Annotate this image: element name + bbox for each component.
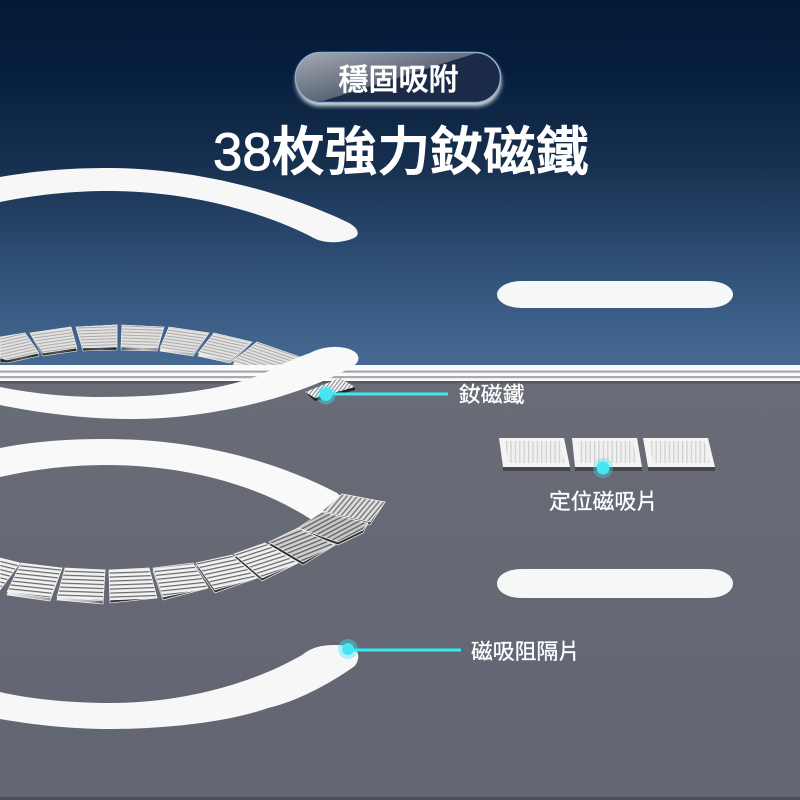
label: magnetic isolation sheet: 磁吸阻隔片 bbox=[471, 639, 580, 664]
label: magnet: 釹磁鐵 bbox=[459, 382, 525, 407]
callout line: magnet bbox=[326, 392, 448, 396]
small magnet under upper ring bbox=[305, 378, 355, 401]
pill: lower bbox=[497, 569, 733, 598]
title: 38枚強力釹磁鐵 bbox=[213, 123, 589, 182]
bottom edge line bbox=[0, 797, 800, 800]
badge text: 穩固吸附 bbox=[338, 64, 458, 97]
pill: upper bbox=[497, 281, 733, 308]
upper white ring back bbox=[0, 168, 358, 242]
background: lower gray zone bbox=[0, 380, 800, 800]
callout line: isolation sheet bbox=[348, 648, 461, 652]
bottom white ring bbox=[0, 645, 358, 729]
callout dot: positioning plate bbox=[593, 458, 613, 478]
badge bbox=[296, 52, 501, 106]
positioning magnet plates bbox=[499, 438, 715, 471]
upper white ring front bbox=[0, 347, 358, 419]
upper magnet arc bbox=[0, 325, 300, 375]
background: upper blue zone bbox=[0, 0, 800, 366]
callout dot: magnet bbox=[316, 386, 336, 404]
lower magnet arc bbox=[0, 494, 385, 604]
lower white ring back bbox=[0, 439, 345, 520]
phone edge band bbox=[0, 365, 800, 384]
callout dot: isolation sheet bbox=[338, 639, 358, 659]
label: positioning magnetic plate: 定位磁吸片 bbox=[549, 489, 658, 514]
